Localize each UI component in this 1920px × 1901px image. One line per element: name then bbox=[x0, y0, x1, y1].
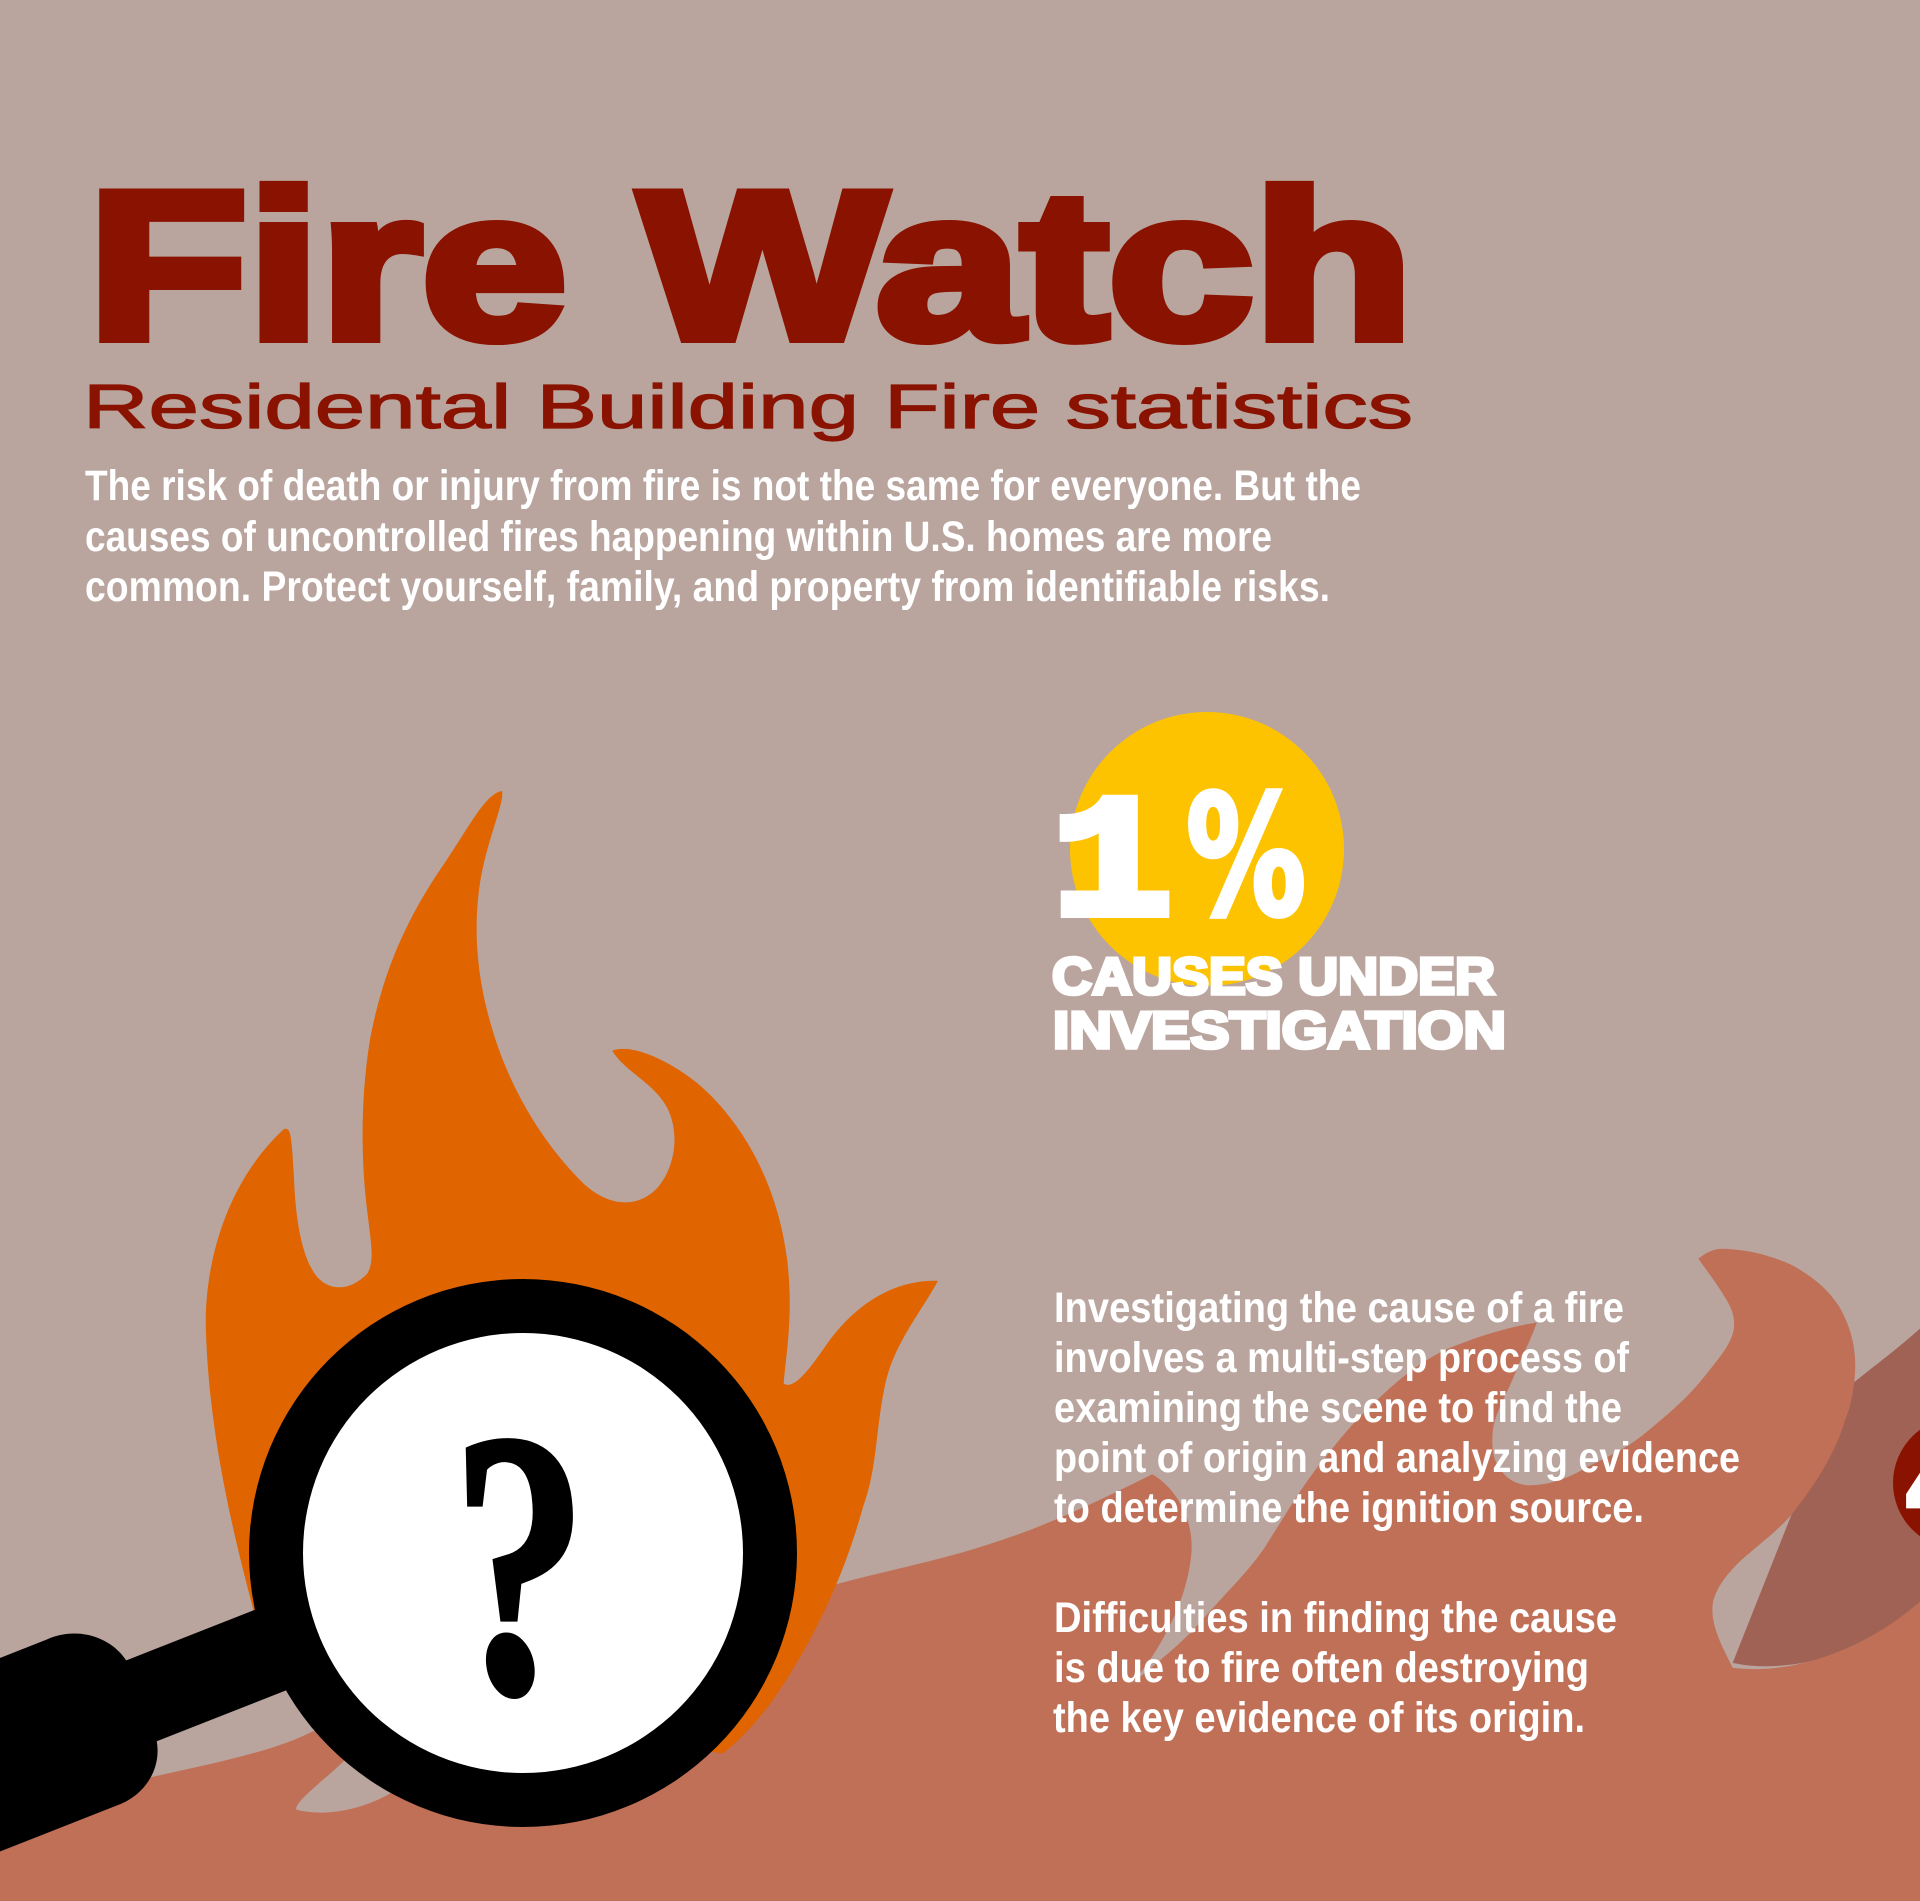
intro paragraph: causes of uncontrolled fires happening within U.S. homes are more bbox=[85, 513, 1272, 561]
investigation paragraph bbox=[1054, 1284, 1740, 1532]
title: Fire Watch bbox=[88, 148, 1413, 383]
investigation paragraph: examining the scene to find the bbox=[1054, 1384, 1622, 1432]
investigation paragraph: to determine the ignition source. bbox=[1054, 1484, 1644, 1532]
magnifier lens bbox=[249, 1279, 797, 1827]
intro paragraph: common. Protect yourself, family, and property from identifiable risks. bbox=[85, 563, 1330, 611]
investigation paragraph: Investigating the cause of a fire bbox=[1054, 1284, 1624, 1332]
stat value 1%: % bbox=[1186, 761, 1306, 954]
clipped red badge at right edge bbox=[1893, 1401, 1920, 1558]
difficulties paragraph: Difficulties in finding the cause bbox=[1054, 1594, 1617, 1642]
stat label bbox=[1052, 948, 1506, 1060]
terracotta ground flames bbox=[0, 1249, 1920, 1901]
question mark: ? bbox=[425, 1355, 613, 1773]
difficulties paragraph: the key evidence of its origin. bbox=[1053, 1694, 1585, 1742]
subtitle: Residental Building Fire statistics bbox=[83, 373, 1413, 442]
intro paragraph: The risk of death or injury from fire is not the same for everyone. But the bbox=[85, 462, 1361, 510]
investigation paragraph: point of origin and analyzing evidence bbox=[1054, 1434, 1740, 1482]
investigation paragraph: involves a multi-step process of bbox=[1054, 1334, 1630, 1382]
dark background flame at right bbox=[1733, 1329, 1920, 1666]
stat label: CAUSES UNDER bbox=[1052, 948, 1495, 1006]
magnifier handle bbox=[0, 1607, 300, 1851]
difficulties paragraph: is due to fire often destroying bbox=[1054, 1644, 1589, 1692]
difficulties paragraph bbox=[1053, 1594, 1617, 1742]
stat value 1% bbox=[1052, 761, 1306, 965]
yellow stat circle bbox=[1070, 712, 1344, 986]
stat value 1%: 1 bbox=[1052, 770, 1172, 965]
intro paragraph bbox=[85, 462, 1361, 611]
orange flame bbox=[206, 791, 938, 1753]
stat label: INVESTIGATION bbox=[1053, 1002, 1506, 1060]
magnifying glass icon bbox=[0, 1279, 797, 1851]
